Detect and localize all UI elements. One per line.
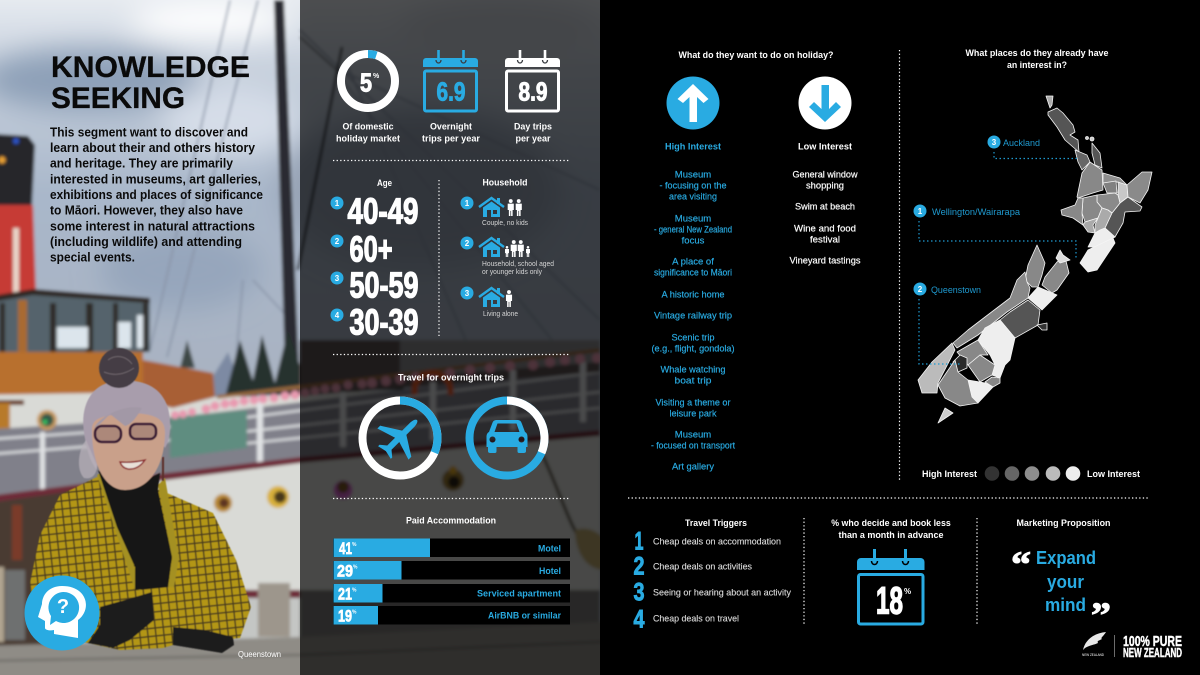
high interest column: Whale watching — [660, 364, 726, 376]
high interest column: area visiting — [669, 192, 717, 202]
intro paragraph: special events. — [50, 250, 135, 264]
map legend — [922, 466, 1141, 481]
holiday activities heading: What do they want to do on holiday? — [678, 50, 834, 61]
map label: Wellington/Wairarapa — [914, 204, 1076, 260]
travel triggers list: 4 — [634, 606, 645, 634]
donut: plane share — [362, 400, 438, 476]
bar: AirBNB or similar 19%: AirBNB or similar — [488, 610, 561, 622]
title — [51, 51, 250, 115]
bar: hotel 29% — [333, 561, 570, 580]
logo: New Zealand fern and 100% Pure New Zealand: NEW ZEALAND — [1082, 653, 1104, 657]
title: SEEKING — [51, 82, 185, 115]
travel triggers list: Cheap deals on travel — [653, 614, 739, 624]
bar: AirBNB or similar 19%: 19 — [338, 606, 352, 626]
woman in yellow cardigan — [30, 348, 251, 653]
high interest column: Museum — [675, 214, 711, 224]
household ranking: 1 — [465, 199, 470, 208]
places of interest heading: What places do they already have — [966, 48, 1108, 59]
paid accommodation bars: Paid Accommodation — [406, 516, 496, 526]
high interest column: focus — [682, 236, 705, 246]
marketing proposition quote: “ — [1011, 544, 1031, 584]
right black panel — [600, 0, 1200, 675]
high interest column — [651, 76, 735, 472]
bar: serviced apartment 21%: 21 — [338, 584, 352, 604]
intro paragraph: some interest in natural attractions — [50, 218, 255, 233]
stat: 8.9 day trips per year calendar — [505, 50, 560, 144]
household ranking: or younger kids only — [482, 267, 542, 276]
bar: serviced apartment 21% — [333, 584, 570, 604]
travel for overnight trips donuts — [362, 372, 545, 476]
stat: 5% of domestic holiday market: 5 — [360, 68, 372, 98]
travel triggers list: Cheap deals on activities — [653, 562, 752, 572]
stat: 8.9 day trips per year calendar: Day trips — [514, 122, 552, 132]
booking lead time: 18% calendar: than a month in advance — [838, 530, 944, 541]
icon: down arrow — [798, 76, 852, 130]
household ranking: Couple, no kids — [482, 218, 528, 227]
map: North Island — [1046, 96, 1152, 272]
map: South Island — [918, 245, 1070, 423]
stat: 5% of domestic holiday market: Of domestic — [342, 122, 394, 132]
map label: Queenstown — [914, 282, 981, 364]
stat: 6.9 overnight trips per year calendar: 6.9 — [436, 76, 466, 106]
low interest column: Swim at beach — [795, 202, 855, 212]
high interest column: - general New Zealand — [654, 224, 732, 236]
donut: car share — [470, 400, 545, 476]
low interest column: Wine and food — [794, 224, 856, 234]
photo location caption: Queenstown — [238, 650, 281, 659]
bar: motel 41%: 41 — [339, 539, 352, 558]
marketing proposition quote: your — [1047, 572, 1084, 592]
age ranking: 60+ — [350, 228, 392, 270]
travel triggers list: Travel Triggers — [685, 518, 747, 529]
stat: 5% of domestic holiday market: % — [373, 73, 380, 80]
marketing proposition quote: Expand — [1036, 548, 1096, 568]
map legend: Low Interest — [1087, 469, 1141, 480]
intro paragraph: exhibitions and places of significance — [50, 187, 263, 202]
age ranking: 40-49 — [348, 190, 418, 232]
map label: Wellington/Wairarapa: Wellington/Wairarapa — [932, 207, 1021, 218]
marketing proposition quote: mind — [1045, 595, 1086, 615]
low interest column: Vineyard tastings — [790, 256, 861, 266]
places of interest heading — [966, 48, 1108, 71]
age ranking: 1 — [335, 199, 340, 208]
background photo: paddle steamer at Queenstown — [0, 0, 640, 675]
stat: 6.9 overnight trips per year calendar: trips per year — [422, 134, 480, 144]
low interest column: festival — [810, 234, 840, 246]
travel triggers list: 3 — [634, 578, 644, 606]
icon: head with question mark: ? — [57, 596, 69, 618]
bar: motel 41% — [333, 538, 570, 558]
travel for overnight trips donuts: Travel for overnight trips — [398, 372, 504, 384]
booking lead time: 18% calendar: % — [904, 587, 911, 596]
high interest column: Museum — [675, 170, 711, 180]
map legend: High Interest — [922, 469, 978, 480]
map label: Queenstown: 2 — [918, 285, 923, 294]
bar: serviced apartment 21%: Serviced apartment — [477, 588, 562, 600]
places of interest heading: an interest in? — [1007, 60, 1067, 71]
household ranking — [460, 178, 554, 318]
marketing proposition quote — [1011, 518, 1111, 635]
low interest column — [790, 76, 861, 266]
high interest column: Museum — [675, 430, 711, 440]
title: KNOWLEDGE — [51, 51, 250, 84]
bar: hotel 29%: 29 — [337, 562, 353, 580]
icon: up arrow — [666, 76, 720, 130]
map label: Auckland — [988, 136, 1078, 158]
logo: New Zealand fern and 100% Pure New Zealand — [1082, 632, 1182, 660]
dark translucent data panel — [300, 0, 600, 675]
map label: Auckland: 3 — [992, 138, 997, 147]
intro paragraph: to Māori. However, they also have — [50, 203, 243, 218]
high interest column: A place of — [672, 256, 714, 268]
high interest column: - focusing on the — [660, 180, 726, 192]
low interest column: Low Interest — [798, 142, 853, 152]
map label: Auckland: Auckland — [1003, 138, 1040, 149]
high interest column: Visiting a theme or — [656, 398, 730, 408]
intro paragraph: This segment want to discover and — [50, 124, 248, 140]
booking lead time: 18% calendar — [831, 518, 951, 624]
intro paragraph: and heritage. They are primarily — [50, 156, 234, 171]
household ranking: Household — [482, 178, 528, 188]
icon: head with question mark — [24, 576, 100, 650]
age ranking: 30-39 — [350, 302, 418, 342]
bar: AirBNB or similar 19% — [333, 606, 570, 626]
age ranking: 4 — [335, 311, 340, 320]
age ranking: 2 — [335, 237, 340, 246]
stat: 8.9 day trips per year calendar: 8.9 — [518, 76, 548, 106]
household ranking: 2 — [465, 239, 470, 248]
bar: AirBNB or similar 19%: % — [352, 610, 357, 616]
travel triggers list: 2 — [634, 552, 644, 580]
age ranking — [330, 178, 418, 342]
map label: Queenstown: Queenstown — [931, 285, 981, 296]
map of New Zealand regions by interest — [918, 96, 1152, 423]
high interest column: significance to Māori — [654, 268, 732, 278]
household ranking: 3 — [465, 289, 470, 298]
stat: 8.9 day trips per year calendar: per year — [516, 134, 551, 144]
household ranking: Household, school aged — [482, 259, 554, 268]
travel triggers list: Cheap deals on accommodation — [653, 536, 781, 548]
stat: 6.9 overnight trips per year calendar: Overnight — [430, 122, 473, 132]
low interest column: General window — [792, 170, 858, 180]
stat: 5% of domestic holiday market — [336, 54, 401, 144]
age ranking: Age — [377, 178, 392, 189]
travel triggers list: Seeing or hearing about an activity — [653, 588, 791, 598]
bar: hotel 29%: % — [353, 564, 358, 570]
map label: Wellington/Wairarapa: 1 — [918, 207, 923, 216]
bar: hotel 29%: Hotel — [539, 566, 561, 577]
bar: motel 41%: Motel — [538, 544, 561, 554]
high interest column: leisure park — [670, 408, 717, 420]
booking lead time: 18% calendar: % who decide and book less — [831, 518, 951, 529]
high interest column: - focused on transport — [651, 440, 735, 452]
household ranking: Living alone — [483, 309, 518, 318]
low interest column: shopping — [806, 180, 844, 192]
intro paragraph: learn about their and others history — [50, 140, 256, 155]
high interest column: Vintage railway trip — [654, 310, 732, 322]
travel triggers list — [634, 518, 791, 634]
paid accommodation bars — [333, 516, 570, 626]
bar: serviced apartment 21%: % — [352, 588, 357, 594]
high interest column: boat trip — [674, 376, 712, 386]
booking lead time: 18% calendar: 18 — [876, 580, 903, 622]
high interest column: Art gallery — [672, 462, 714, 472]
intro paragraph — [50, 124, 263, 264]
high interest column: (e.g., flight, gondola) — [652, 344, 734, 354]
high interest column: Scenic trip — [672, 332, 714, 344]
intro paragraph: (including wildlife) and attending — [50, 234, 242, 249]
marketing proposition quote: ” — [1091, 595, 1111, 635]
bar: motel 41%: % — [352, 542, 357, 548]
travel triggers list: 1 — [634, 528, 644, 556]
stat: 6.9 overnight trips per year calendar — [422, 50, 480, 144]
high interest column: A historic home — [662, 290, 724, 300]
high interest column: High Interest — [665, 142, 722, 152]
age ranking: 3 — [335, 274, 340, 283]
age ranking: 50-59 — [350, 264, 418, 306]
marketing proposition quote: Marketing Proposition — [1016, 518, 1111, 529]
stat: 5% of domestic holiday market: holiday market — [336, 134, 401, 144]
intro paragraph: interested in museums, art galleries, — [50, 171, 261, 186]
